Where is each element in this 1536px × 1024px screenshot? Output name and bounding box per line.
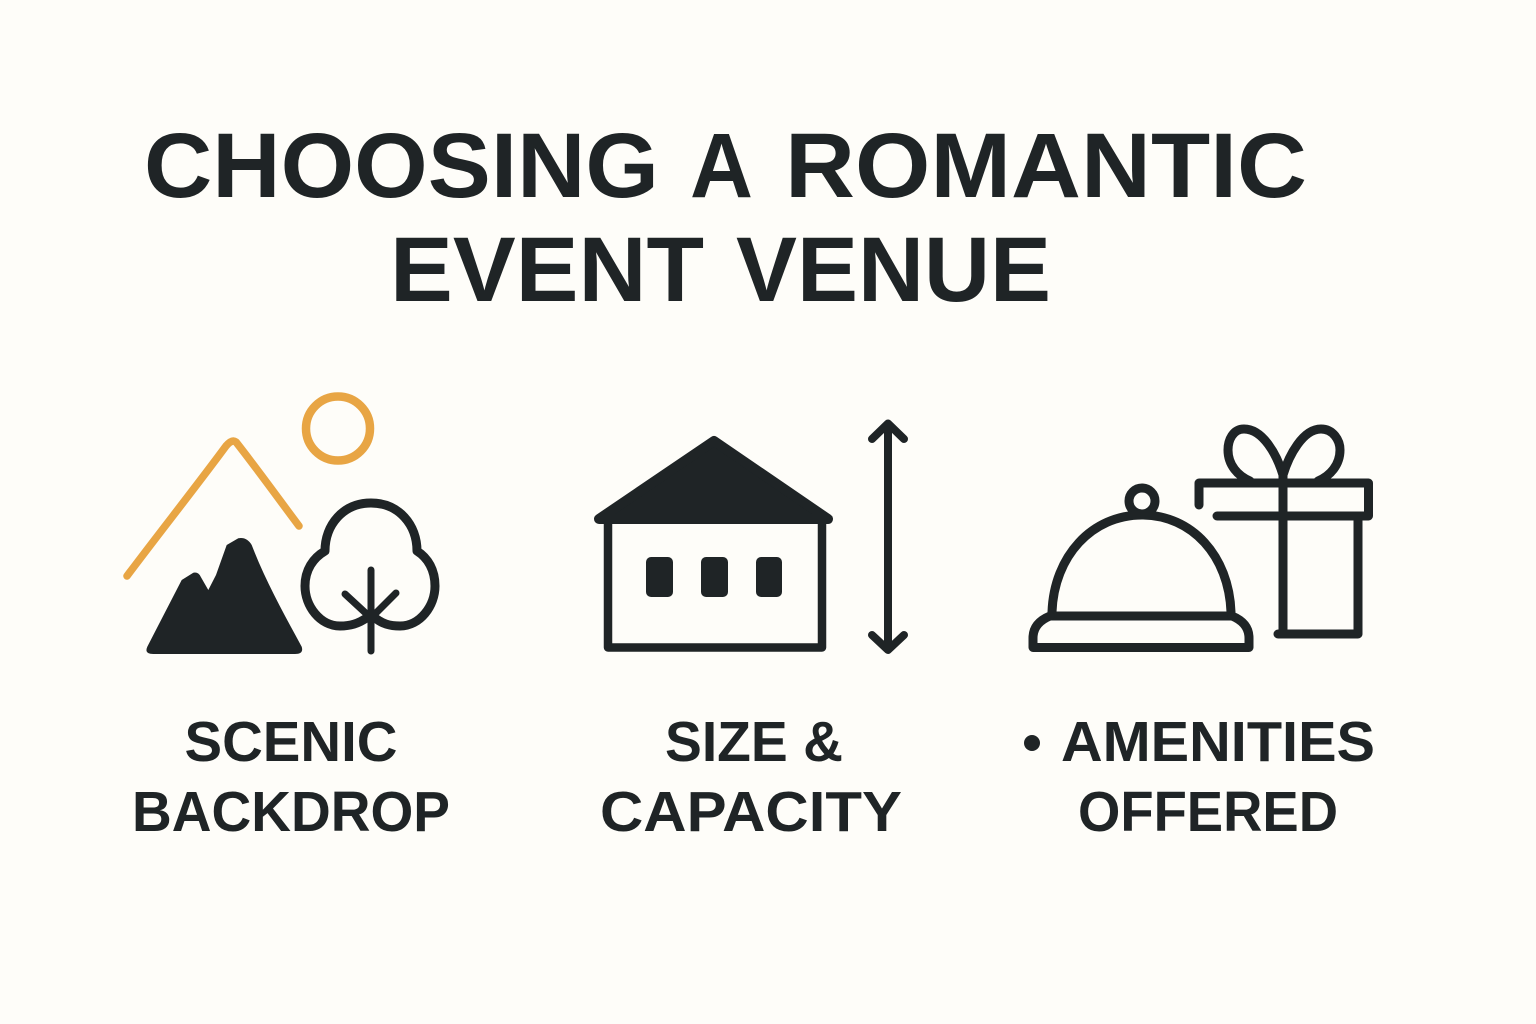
double arrow [872, 424, 904, 650]
cloche [1033, 488, 1249, 648]
label: amenities offered: AMENITIES [1061, 710, 1375, 774]
title: ROMANTIC [785, 115, 1307, 217]
icon: cloche and gift [1033, 429, 1368, 648]
label: size and capacity: SIZE & [665, 710, 843, 774]
gift [1199, 429, 1368, 634]
label: amenities offered [1024, 710, 1375, 844]
title [144, 115, 1307, 321]
solid mountain [146, 538, 302, 654]
windows [646, 557, 673, 597]
sun [306, 396, 370, 460]
title: EVENT [390, 219, 704, 321]
icon: venue building with height arrow [599, 424, 904, 650]
label: amenities offered: OFFERED [1078, 780, 1338, 844]
icon: scenic landscape [127, 396, 435, 654]
title: CHOOSING [144, 115, 659, 217]
label: scenic backdrop [132, 710, 450, 844]
title: A [690, 115, 753, 217]
label: size and capacity [600, 710, 902, 844]
label: size and capacity: CAPACITY [600, 780, 902, 844]
walls [608, 522, 822, 648]
title: VENUE [736, 219, 1051, 321]
tree [305, 503, 435, 626]
outline mountain [127, 441, 299, 576]
roof [599, 441, 828, 519]
label: scenic backdrop: BACKDROP [132, 780, 450, 844]
tree trunk and branches [345, 570, 396, 651]
label: scenic backdrop: SCENIC [184, 710, 398, 774]
